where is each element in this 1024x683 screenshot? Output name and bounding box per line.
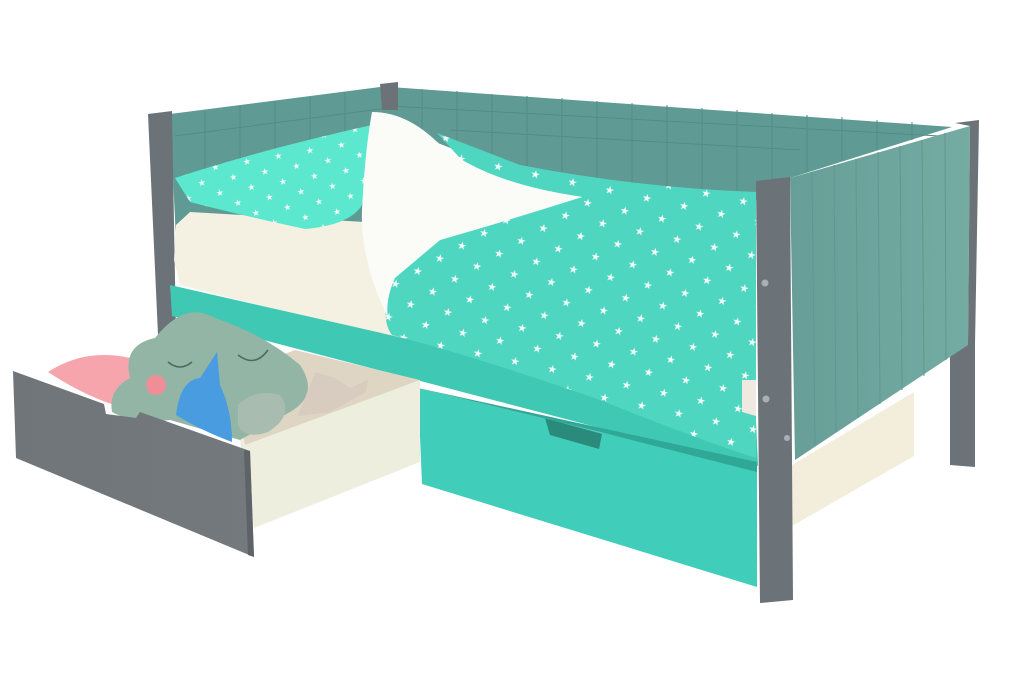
right end panel <box>790 126 970 460</box>
pillow <box>175 125 372 229</box>
duvet <box>385 133 756 458</box>
white sheet sliver near post <box>742 380 756 416</box>
front post <box>756 177 793 603</box>
left drawer front <box>13 371 254 557</box>
back right post <box>955 120 979 345</box>
left back panel <box>170 86 392 240</box>
toys <box>48 312 368 442</box>
blanket white fold <box>362 112 582 318</box>
back right leg and cream drawer behind <box>792 340 975 526</box>
left post <box>148 82 398 335</box>
back long panel <box>390 87 952 200</box>
left open drawer interior <box>230 350 420 528</box>
mattress <box>174 212 400 340</box>
teal bed rail <box>170 285 758 466</box>
right drawer <box>418 388 757 587</box>
